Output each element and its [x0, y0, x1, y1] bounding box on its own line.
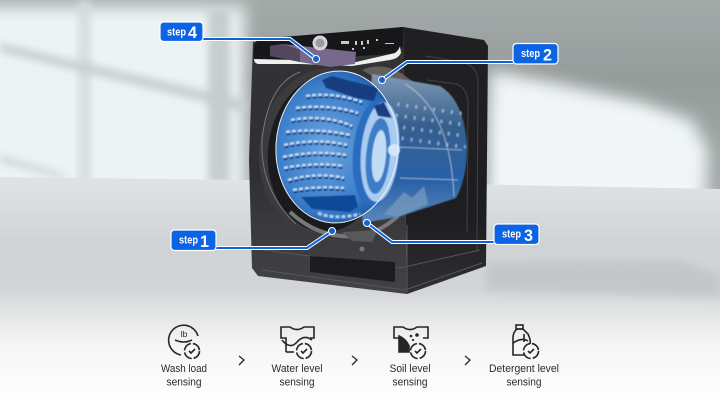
washing machine — [249, 27, 488, 294]
callout: step 3: 3 — [524, 226, 533, 245]
translucent rear drum — [362, 74, 470, 223]
label: Water level — [272, 363, 322, 375]
label: Wash load — [161, 363, 207, 375]
label: Detergent level — [489, 363, 559, 375]
gasket highlight — [262, 72, 300, 224]
door gasket — [251, 61, 401, 243]
item: detergent level sensing — [489, 325, 559, 388]
display lights — [341, 39, 394, 50]
icon: chevron — [239, 356, 244, 365]
rear drum wall — [348, 97, 404, 209]
callout: step 2 — [378, 44, 558, 84]
bottom lifter — [301, 195, 358, 212]
callout: step 4: 4 — [188, 23, 198, 42]
label: sensing — [506, 376, 542, 388]
callout: step 1 — [171, 228, 336, 251]
washer front panel — [249, 27, 407, 294]
label: sensing — [392, 376, 428, 388]
dial — [312, 36, 328, 50]
callout: step 2: 2 — [543, 46, 552, 64]
item: wash load sensing — [161, 325, 207, 388]
top lifter — [322, 76, 378, 101]
drum opening — [271, 67, 404, 227]
drum rim — [271, 67, 403, 227]
label: sensing — [166, 376, 202, 388]
callout: step 4: step — [167, 26, 186, 38]
icon: shirt with water — [281, 327, 314, 358]
icon: detergent bottle — [513, 325, 538, 358]
icon: chevron — [465, 356, 470, 365]
callout: step 3: step — [502, 228, 521, 240]
callout: step 3 — [364, 220, 539, 245]
floor — [0, 177, 720, 404]
mottled top of drum — [362, 66, 420, 86]
detergent drawer — [270, 44, 356, 67]
lower ring — [290, 212, 398, 236]
drum perforations — [284, 97, 362, 192]
item: water level sensing — [272, 327, 322, 388]
label: Soil level — [390, 363, 430, 375]
side panel inner outline — [425, 56, 478, 250]
label: sensing — [280, 376, 314, 388]
icon: chevron — [352, 356, 357, 365]
callout: step 2: step — [521, 48, 540, 60]
callout: step 1: step — [179, 234, 198, 246]
item: soil level sensing — [390, 327, 430, 388]
icon: wash load: lb — [181, 329, 188, 339]
floor shadow — [486, 260, 720, 298]
callout: step 1: 1 — [200, 232, 209, 251]
control panel — [254, 27, 403, 67]
background wall — [0, 0, 720, 215]
base frame — [262, 225, 482, 292]
callout: step 4 — [160, 22, 320, 62]
washer side panel — [403, 27, 488, 294]
icon: shirt with soil — [394, 327, 428, 358]
